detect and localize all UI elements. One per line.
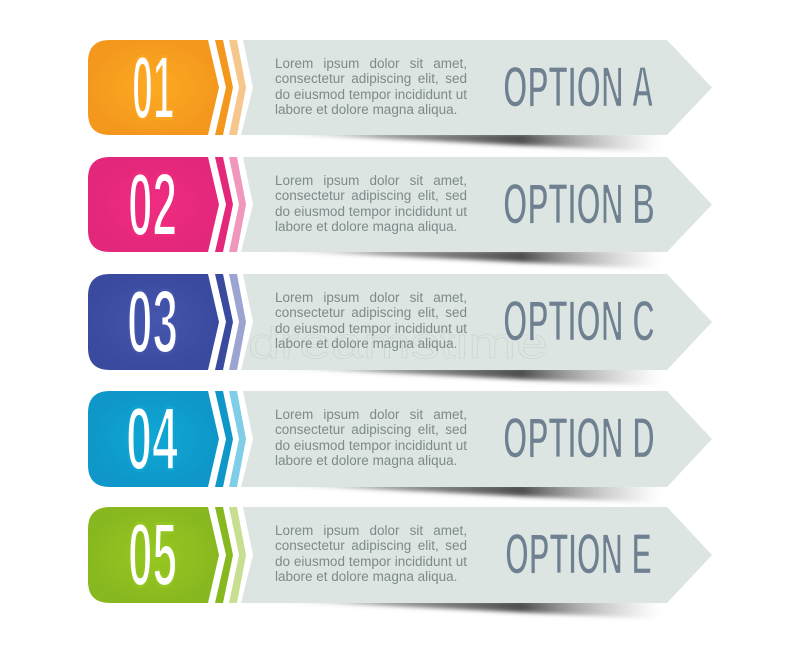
description text: labore et dolore magna aliqua. (275, 453, 457, 468)
option row 05 (88, 506, 712, 618)
option row 03 (88, 272, 712, 386)
shapes: number tab, chevrons and arrow panel (88, 38, 712, 152)
description text (275, 290, 467, 351)
description text (275, 56, 467, 117)
shapes: number tab, chevrons and arrow panel: OPTION B (503, 172, 655, 237)
description text: Lorem ipsum dolor sit amet, (275, 523, 467, 538)
shapes: number tab, chevrons and arrow panel: OPTION E (505, 522, 652, 587)
option row 04 (88, 390, 712, 502)
description text: Lorem ipsum dolor sit amet, (275, 56, 467, 71)
shapes: number tab, chevrons and arrow panel: OPTION A (503, 55, 654, 120)
description text (275, 173, 467, 234)
shapes: number tab, chevrons and arrow panel (88, 272, 712, 386)
shapes: number tab, chevrons and arrow panel: OPTION D (503, 406, 655, 471)
description text: do eiusmod tempor incididunt ut (275, 87, 467, 102)
shapes: number tab, chevrons and arrow panel (88, 156, 712, 268)
option row 02 (88, 156, 712, 268)
description text (275, 523, 467, 584)
shapes: number tab, chevrons and arrow panel: OPTION C (503, 289, 655, 354)
shapes: number tab, chevrons and arrow panel: dreamstime (248, 319, 548, 368)
description text: consectetur adipiscing elit, sed (275, 305, 467, 320)
shapes: number tab, chevrons and arrow panel: 05 (128, 506, 177, 606)
description text: do eiusmod tempor incididunt ut (275, 554, 467, 569)
description text: labore et dolore magna aliqua. (275, 102, 457, 117)
shapes: number tab, chevrons and arrow panel: 02 (128, 156, 177, 256)
description text: do eiusmod tempor incididunt ut (275, 438, 467, 453)
description text: do eiusmod tempor incididunt ut (275, 321, 467, 336)
description text: consectetur adipiscing elit, sed (275, 71, 467, 86)
description text (275, 407, 467, 468)
description text: labore et dolore magna aliqua. (275, 219, 457, 234)
shapes: number tab, chevrons and arrow panel: 04 (126, 390, 178, 490)
shapes: number tab, chevrons and arrow panel (88, 506, 712, 618)
description text: Lorem ipsum dolor sit amet, (275, 173, 467, 188)
description text: Lorem ipsum dolor sit amet, (275, 290, 467, 305)
description text: consectetur adipiscing elit, sed (275, 188, 467, 203)
shapes: number tab, chevrons and arrow panel (88, 390, 712, 502)
description text: consectetur adipiscing elit, sed (275, 422, 467, 437)
option row 01 (88, 38, 712, 152)
description text: Lorem ipsum dolor sit amet, (275, 407, 467, 422)
description text: labore et dolore magna aliqua. (275, 569, 457, 584)
shapes: number tab, chevrons and arrow panel: 03 (127, 272, 178, 372)
description text: consectetur adipiscing elit, sed (275, 538, 467, 553)
description text: labore et dolore magna aliqua. (275, 336, 457, 351)
shapes: number tab, chevrons and arrow panel: 01 (132, 38, 174, 138)
description text: do eiusmod tempor incididunt ut (275, 204, 467, 219)
